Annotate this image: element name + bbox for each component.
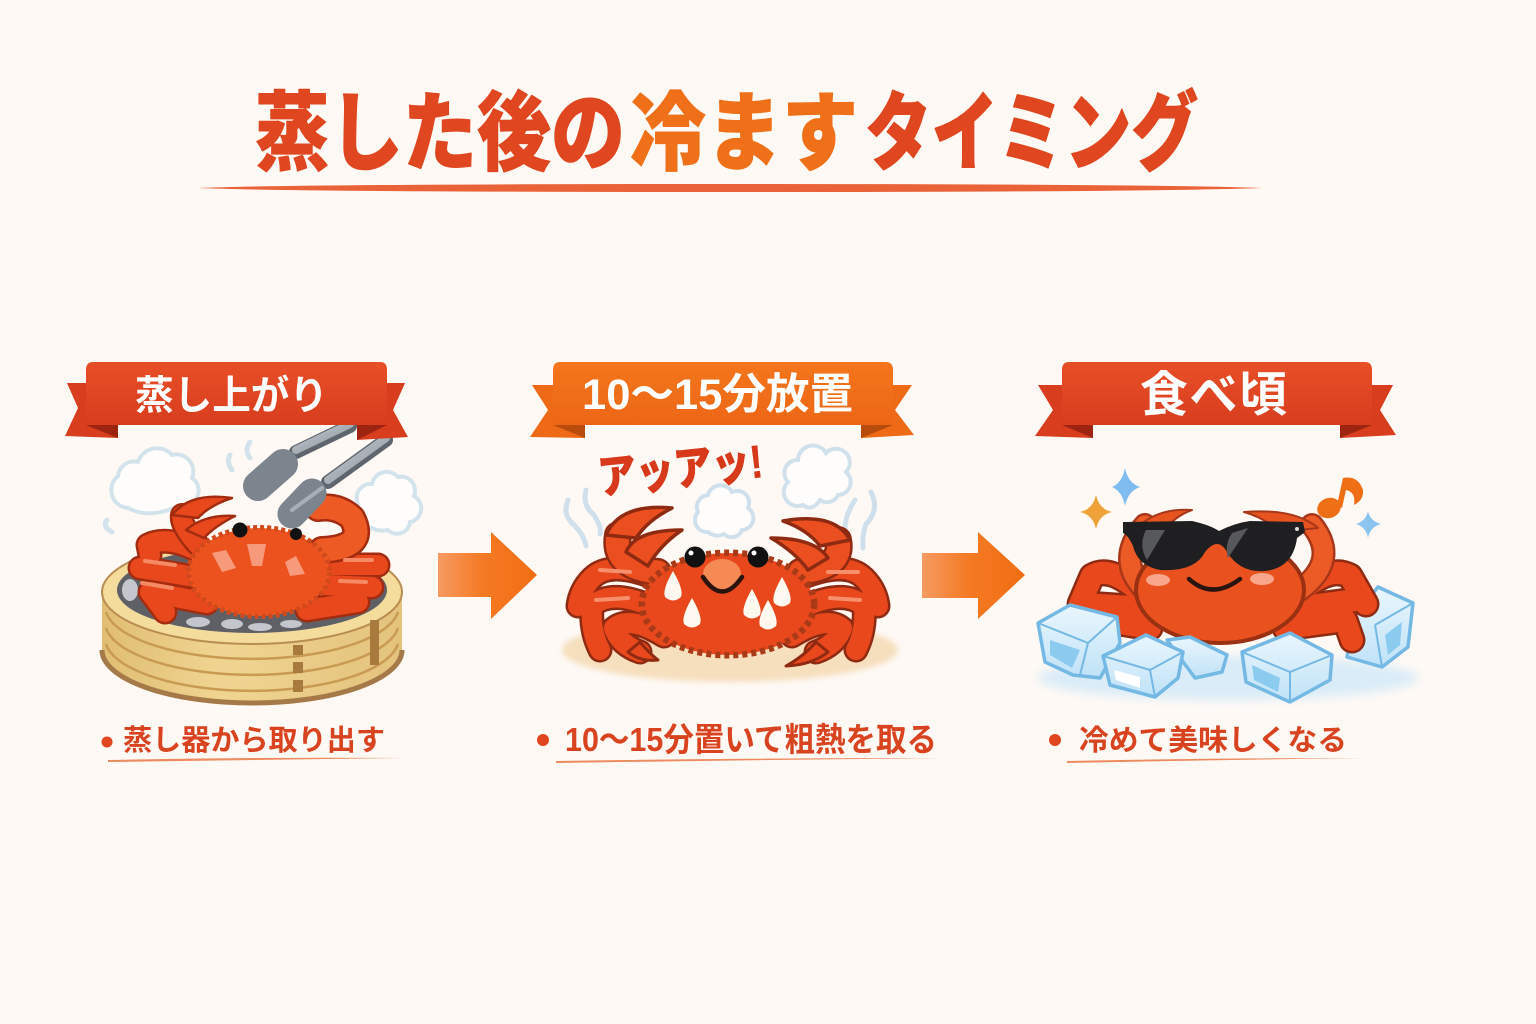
illustration: bamboo steamer [102,540,402,703]
arrow: first to second step [438,532,537,619]
icon: steam cloud lower [695,485,753,537]
illustration: cool crab [1080,510,1366,643]
banner: steaming done [65,362,408,440]
icon: right steam cloud [352,472,421,534]
label: hot exclamation: アッアッ! [596,435,765,504]
panel: let stand 10 to 15 minutes [530,362,943,763]
caption: let stand to cool: 10〜15分置いて粗熱を取る [565,721,937,758]
arrow: second to third step [922,532,1025,619]
icon: left steam cloud [105,442,250,532]
banner: ready to eat [1035,362,1396,438]
illustration: crab on steamer [140,497,378,616]
icon: crab eyes [684,546,768,568]
title underline [198,184,1262,192]
icon: sunglasses [1123,521,1305,571]
shadow: melted water [1038,656,1418,700]
title: タイミング [865,86,1198,182]
title: 蒸した後の [255,86,625,182]
icon: steam wisps [566,490,875,548]
banner: let stand [530,362,914,438]
banner: steaming done: 蒸し上がり [135,374,328,418]
illustration: sweating crab [578,507,878,666]
icon: music note [1314,478,1363,522]
banner: ready to eat: 食べ頃 [1140,369,1287,422]
caption: becomes tasty when cooled: 冷めて美味しくなる [1079,724,1347,757]
title [255,86,1198,182]
icon: steam cloud upper [784,445,851,508]
panel: steaming done [65,362,421,762]
panel: ready to eat [1035,362,1418,763]
caption: becomes tasty when cooled [1049,724,1364,763]
icon: sparkles [1080,468,1381,538]
icon: back ice cube [1347,587,1413,667]
icon: ice cubes [1038,605,1332,702]
title: 冷ます [630,86,858,182]
banner: let stand: 10〜15分放置 [582,371,853,419]
caption: take out of the steamer: 蒸し器から取り出す [123,724,385,757]
icon: metal tongs [258,424,386,514]
shadow: sand patch [562,618,898,682]
icon: sweat drops [664,571,791,630]
